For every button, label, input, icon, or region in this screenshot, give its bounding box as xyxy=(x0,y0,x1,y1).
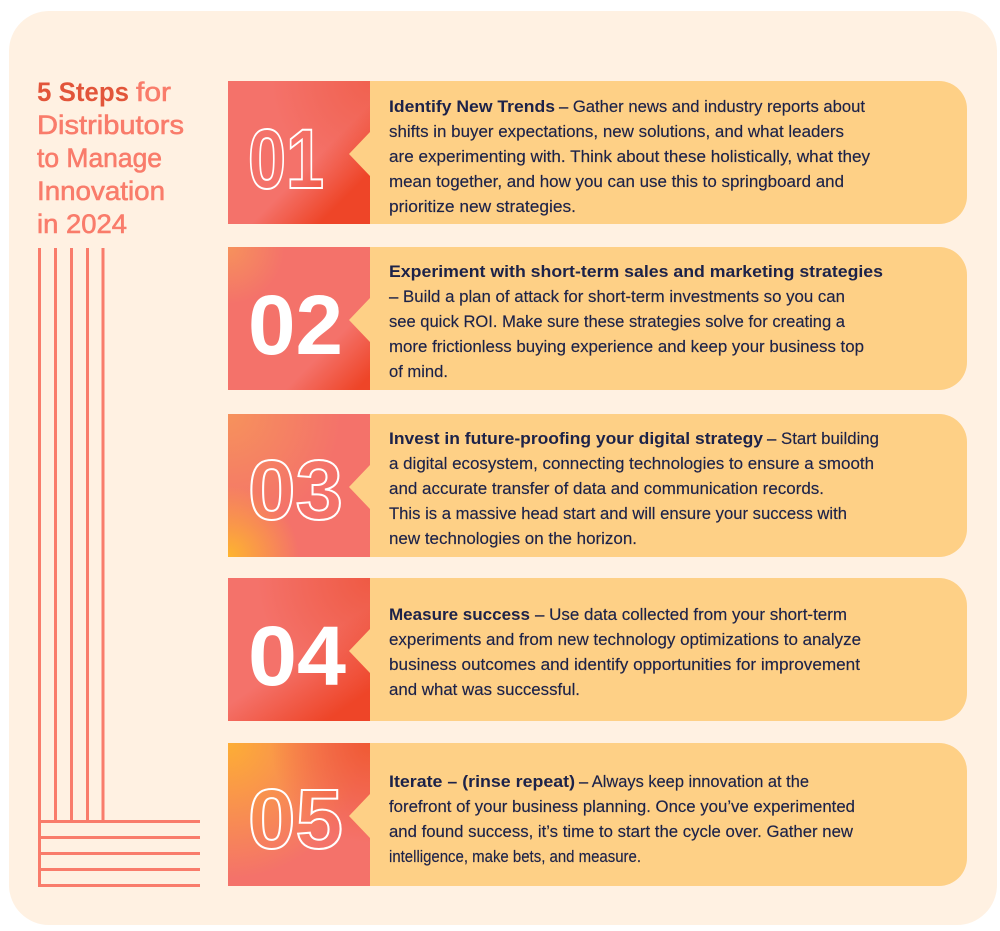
step 01 number box: 01 xyxy=(248,112,324,206)
title: for xyxy=(136,77,171,107)
step 01 text: – Gather news and industry reports about xyxy=(559,98,866,116)
step 01 text: Identify New Trends xyxy=(389,98,555,116)
step 03 text: Invest in future-proofing your digital strategy xyxy=(389,430,764,448)
step 04 text: and what was successful. xyxy=(389,681,580,699)
step 01 text xyxy=(389,98,871,216)
step 04 number box xyxy=(228,578,370,721)
title: Distributors xyxy=(37,110,184,140)
step 04 text: experiments and from new technology optimizations to analyze xyxy=(389,631,861,649)
step 01 card xyxy=(300,81,967,224)
step 01 text: shifts in buyer expectations, new solutions, and what leaders xyxy=(389,123,844,141)
step 05 text: – Always keep innovation at the xyxy=(579,773,809,791)
step 02 text: more frictionless buying experience and keep your business top xyxy=(389,338,864,356)
step 05 xyxy=(228,743,967,886)
step 01 xyxy=(228,81,967,224)
title: to Manage xyxy=(37,143,162,173)
step 02 text: – Build a plan of attack for short-term investments so you can xyxy=(389,288,845,306)
step 02 text: see quick ROI. Make sure these strategies solve for creating a xyxy=(389,313,845,331)
step 02 number box: 02 xyxy=(248,278,343,372)
step 03 text: a digital ecosystem, connecting technologies to ensure a smooth xyxy=(389,455,874,473)
step 03 text xyxy=(389,430,879,548)
step 04 text: – Use data collected from your short-term xyxy=(535,606,847,624)
step 05 text: and found success, it’s time to start the cycle over. Gather new xyxy=(389,823,853,841)
step 03 text: new technologies on the horizon. xyxy=(389,530,637,548)
step 01 text: prioritize new strategies. xyxy=(389,198,576,216)
step 02 text: of mind. xyxy=(389,363,448,381)
step 01 number box xyxy=(228,81,370,224)
step 05 number box xyxy=(228,743,370,886)
step 03 xyxy=(228,414,967,557)
step 03 number box: 03 xyxy=(248,443,343,537)
step 03 card xyxy=(300,414,967,557)
step 05 text: Iterate – (rinse repeat) xyxy=(389,773,575,791)
step 03 text: This is a massive head start and will ensure your success with xyxy=(389,505,847,523)
step 03 text: – Start building xyxy=(767,430,879,448)
step 05 text: forefront of your business planning. Once you’ve experimented xyxy=(389,798,855,816)
step 04 text: business outcomes and identify opportunities for improvement xyxy=(389,656,861,674)
step 01 text: mean together, and how you can use this to springboard and xyxy=(389,173,844,191)
step 05 number box: 05 xyxy=(248,772,343,866)
step 02 number box xyxy=(228,247,370,390)
step 02 text xyxy=(389,263,883,381)
step 03 text: and accurate transfer of data and communication records. xyxy=(389,480,824,498)
step 04 text: Measure success xyxy=(389,606,530,624)
step 04 text xyxy=(389,606,861,699)
step 05 card xyxy=(300,743,967,886)
step 02 card xyxy=(300,247,967,390)
title: 5 Steps xyxy=(37,77,129,107)
step 04 number box: 04 xyxy=(248,609,346,703)
step 01 text: are experimenting with. Think about these holistically, what they xyxy=(389,148,871,166)
step 04 xyxy=(228,578,967,721)
title: Innovation xyxy=(37,176,165,206)
step 05 text xyxy=(389,773,855,866)
step 02 xyxy=(228,247,967,390)
title: in 2024 xyxy=(37,209,127,239)
step 02 text: Experiment with short-term sales and marketing strategies xyxy=(389,263,883,281)
title xyxy=(37,77,184,239)
decorative line motif xyxy=(38,248,200,887)
step 05 text: intelligence, make bets, and measure. xyxy=(389,848,641,866)
step 04 card xyxy=(300,578,967,721)
step 03 number box xyxy=(228,414,370,557)
